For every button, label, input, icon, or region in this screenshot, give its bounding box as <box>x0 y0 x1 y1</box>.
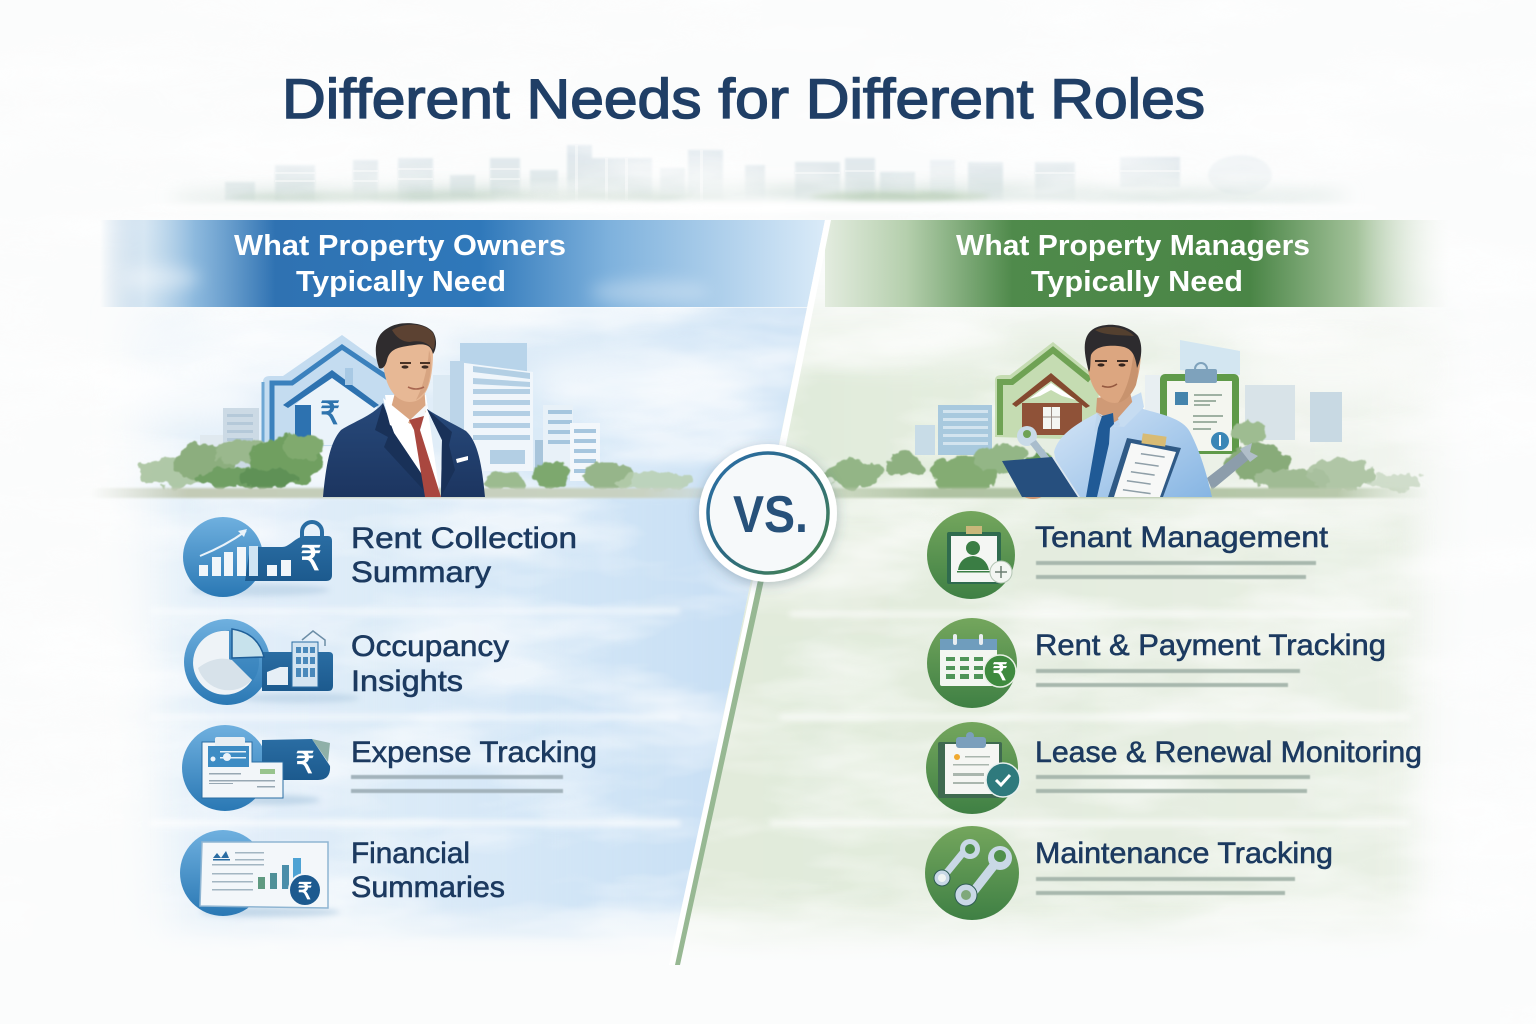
label: Lease & Renewal Monitoring <box>1035 736 1422 769</box>
vs badge <box>699 444 837 582</box>
label: Summaries <box>351 871 505 904</box>
placeholder lines <box>1036 669 1300 687</box>
header text: owners: Typically Need <box>296 266 506 298</box>
label: Tenant Management <box>1035 521 1329 554</box>
item: tenant management <box>927 511 1329 599</box>
panel: property owners (left) <box>102 146 832 941</box>
background buildings <box>915 340 1342 455</box>
office tower right <box>433 343 533 471</box>
manager figure <box>1054 325 1212 497</box>
icon: pie and buildings <box>184 619 360 705</box>
placeholder lines <box>1036 561 1316 579</box>
item: expense tracking <box>182 725 597 811</box>
item: maintenance tracking <box>925 826 1333 920</box>
icon: report and rupee: ₹ <box>298 879 312 905</box>
label: Financial <box>351 837 470 870</box>
icon: tenant profile <box>927 511 1015 599</box>
label: Occupancy <box>351 630 509 663</box>
house shield with rupee <box>263 335 395 447</box>
house shield with rupee: ₹ <box>320 394 340 432</box>
header band: owners <box>100 220 830 307</box>
ground strip <box>810 488 1430 498</box>
label: Expense Tracking <box>351 736 597 769</box>
header text: owners: What Property Owners <box>234 230 566 262</box>
header text: managers <box>956 230 1310 298</box>
label <box>351 630 509 698</box>
header text: owners <box>234 230 566 298</box>
label: Maintenance Tracking <box>1035 837 1333 870</box>
checklist board <box>1160 363 1239 454</box>
title: Different Needs for Different Roles <box>282 67 1205 130</box>
brown house <box>1012 373 1090 435</box>
header text: managers: What Property Managers <box>956 230 1310 262</box>
trees <box>139 432 695 492</box>
green house shield <box>995 342 1100 440</box>
item: financial summaries <box>180 830 505 917</box>
icon: calendar and rupee: ₹ <box>992 658 1008 686</box>
header band: managers <box>825 220 1450 307</box>
illustration: manager with property <box>810 325 1430 499</box>
vs badge: VS. <box>733 486 808 544</box>
label <box>351 522 577 589</box>
small towers right <box>535 405 600 481</box>
skyline backdrop <box>140 145 1380 214</box>
label: Rent Collection <box>351 522 577 555</box>
trees <box>825 420 1423 492</box>
tablet and hand <box>1002 457 1080 499</box>
label: Rent & Payment Tracking <box>1035 629 1386 662</box>
ground strip <box>90 488 740 498</box>
label <box>351 837 505 904</box>
small buildings left <box>200 408 259 468</box>
item: rent collection summary <box>183 517 577 597</box>
item: occupancy insights <box>184 619 509 705</box>
panel background: blue haze <box>146 146 832 941</box>
header text: managers: Typically Need <box>1031 266 1243 298</box>
icon: calendar and rupee <box>927 618 1017 708</box>
icon: document and rupee tag: ₹ <box>295 746 315 781</box>
icon: bars and rupee lock: ₹ <box>300 539 322 579</box>
divider line <box>669 220 831 965</box>
icon: document and rupee tag <box>182 725 330 811</box>
icon: clipboard and check <box>926 722 1020 814</box>
placeholder lines <box>1036 877 1295 895</box>
panel: property managers (right) <box>690 156 1434 938</box>
clipboard in hand <box>1108 433 1181 497</box>
wrenches behind figure <box>1017 426 1258 490</box>
label: Insights <box>351 665 463 698</box>
icon: wrenches <box>925 826 1019 920</box>
icon: report and rupee <box>180 830 340 917</box>
illustration: owner with property <box>90 323 740 498</box>
placeholder lines <box>1036 775 1310 793</box>
item: lease and renewal monitoring <box>926 722 1422 814</box>
owner figure <box>323 323 485 497</box>
item: rent and payment tracking <box>927 618 1386 708</box>
placeholder lines <box>351 775 563 793</box>
icon: bars and rupee lock <box>183 517 332 597</box>
panel background: green haze <box>690 156 1428 938</box>
label: Summary <box>351 556 491 589</box>
